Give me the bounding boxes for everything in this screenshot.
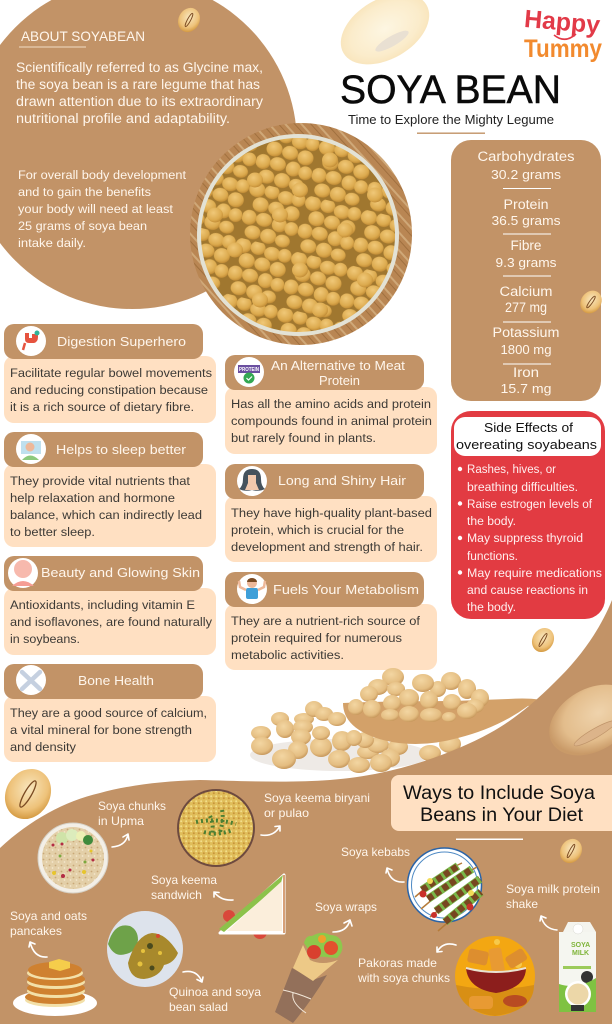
text: glycine max intro bbox=[16, 60, 263, 126]
label: pakoras bbox=[357, 957, 450, 985]
text: protein details bbox=[231, 397, 432, 445]
text: metabolism details: They are a nutrient-rich source of bbox=[231, 614, 421, 628]
nutrient: protein: Protein bbox=[504, 197, 548, 212]
food: soya milk carton: MILK bbox=[572, 950, 589, 957]
logo: happy tummy bbox=[523, 5, 602, 63]
text: bone details bbox=[10, 706, 207, 754]
wooden spoon bbox=[343, 698, 548, 744]
label: soya keema sandwich bbox=[151, 874, 218, 902]
text: daily intake: intake daily. bbox=[18, 236, 86, 250]
arrow: quinoa bbox=[183, 971, 203, 982]
spoon beans bbox=[348, 668, 489, 722]
card: long and shiny hair bbox=[225, 464, 437, 562]
nutrient: calcium: 277 mg bbox=[505, 300, 547, 315]
card: bone health: Bone Health bbox=[78, 673, 154, 688]
icon: large pale bean top bbox=[328, 0, 442, 79]
text: beauty details: Antioxidants, including vitamin E bbox=[10, 598, 195, 612]
card: digestion superhero bbox=[4, 324, 216, 423]
text: bone details: and density bbox=[10, 740, 77, 754]
text: hair details: protein, which is crucial for the bbox=[231, 523, 404, 537]
label: quinoa and soya bean salad: bean salad bbox=[169, 1001, 228, 1014]
card: helps to sleep better bbox=[4, 432, 216, 547]
panel: nutrition facts bbox=[451, 140, 601, 401]
icon: small bean lower right bbox=[556, 835, 586, 867]
label: soya keema sandwich: sandwich bbox=[151, 889, 202, 902]
heading: alternative to meat: Protein bbox=[319, 374, 360, 388]
label: soya keema biryani: or pulao bbox=[264, 807, 309, 820]
label: soya keema biryani bbox=[264, 792, 370, 820]
text: hair details: They have high-quality plant-based bbox=[231, 506, 432, 520]
list: side effect bullets: the body. bbox=[467, 514, 516, 528]
nutrient: calcium bbox=[500, 284, 552, 315]
arrow: wraps bbox=[333, 920, 352, 932]
nutrient: carbohydrates: Carbohydrates bbox=[478, 149, 575, 164]
text: bone details: They are a good source of calcium, bbox=[10, 706, 207, 720]
label: soya kebabs: Soya kebabs bbox=[341, 846, 410, 859]
heading: ways to include soya beans bbox=[391, 775, 612, 831]
food: soya keema biryani bbox=[177, 789, 255, 867]
text: glycine max intro: Scientifically referred to as Glycine max, bbox=[16, 60, 263, 75]
heading: ways to include soya beans: Beans in Your Diet bbox=[420, 805, 584, 826]
text: daily intake bbox=[18, 168, 187, 250]
label: pakoras: Pakoras made bbox=[358, 957, 437, 970]
label: soya keema sandwich: Soya keema bbox=[151, 874, 218, 887]
heading: side effects: overeating soyabeans bbox=[456, 437, 598, 452]
list: side effect bullets: Rashes, hives, or bbox=[467, 462, 556, 476]
list: side effect bullets: May require medications bbox=[467, 566, 602, 580]
label: pakoras: with soya chunks bbox=[357, 972, 450, 985]
label: soya chunks in upma: Soya chunks bbox=[98, 800, 166, 813]
food: soya milk carton bbox=[559, 922, 596, 1012]
icon: sleeping person bbox=[16, 434, 46, 464]
text: digestion details: and reducing constipation because bbox=[10, 383, 208, 397]
text: hair details: development and strength of hair. bbox=[231, 540, 423, 554]
text: daily intake: and to gain the benefits bbox=[18, 185, 151, 199]
text: glycine max intro: nutritional profile and adaptability. bbox=[16, 111, 230, 126]
text: sleep details: They provide vital nutrients that bbox=[10, 474, 191, 488]
food: sandwich bbox=[219, 875, 285, 939]
text: metabolism details: metabolic activities. bbox=[231, 648, 344, 662]
icon: crossed bones bbox=[16, 665, 46, 695]
text: metabolism details: protein required for numerous bbox=[231, 631, 402, 645]
text: daily intake: 25 grams of soya bean bbox=[18, 219, 147, 233]
card: beauty and glowing skin bbox=[4, 556, 216, 655]
card: helps to sleep better: Helps to sleep better bbox=[56, 442, 187, 457]
background: brown wave bbox=[0, 600, 612, 1024]
list: side effect bullets: May suppress thyroid bbox=[467, 531, 583, 545]
logo: happy tummy: Tummy bbox=[524, 35, 602, 63]
logo: happy tummy: Happy bbox=[523, 5, 601, 39]
list: side effect bullets: breathing difficulties. bbox=[467, 480, 578, 494]
text: protein details: but rarely found in plants. bbox=[231, 431, 376, 445]
icon: small bean top bbox=[174, 4, 204, 36]
label: quinoa and soya bean salad: Quinoa and soya bbox=[169, 986, 262, 999]
card: fuels your metabolism bbox=[225, 572, 437, 670]
text: sleep details: help relaxation and hormone bbox=[10, 491, 175, 505]
nutrient: iron: Iron bbox=[513, 365, 539, 380]
text: glycine max intro: the soya bean is a rare legume that has bbox=[16, 77, 260, 92]
list: side effect bullets bbox=[458, 462, 602, 614]
text: digestion details: Facilitate regular bowel movements bbox=[10, 366, 212, 380]
text: beauty details bbox=[10, 598, 213, 646]
nutrient: protein: 36.5 grams bbox=[492, 213, 561, 228]
arrow: soya milk bbox=[540, 916, 557, 930]
image: soybeans on wooden spoon bbox=[250, 668, 548, 773]
nutrient: calcium: Calcium bbox=[500, 284, 552, 299]
icon: protein check: PROTEIN bbox=[239, 367, 259, 373]
text: beauty details: and isoflavones, are found naturally bbox=[10, 615, 213, 629]
heading: alternative to meat: An Alternative to Meat bbox=[271, 359, 406, 373]
text: daily intake: For overall body development bbox=[18, 168, 187, 182]
subtitle: Time to Explore the Mighty Legume bbox=[348, 113, 554, 127]
text: glycine max intro: drawn attention due to its extraordinary bbox=[16, 94, 263, 109]
arrow: upma bbox=[112, 834, 129, 847]
card: bone health bbox=[4, 664, 216, 762]
food: soya kebabs bbox=[408, 848, 483, 931]
food: pakoras bowl bbox=[455, 936, 535, 1016]
label: soya and oats pancakes: pancakes bbox=[10, 925, 62, 938]
food: soya wrap bbox=[275, 933, 342, 1023]
label: quinoa and soya bean salad bbox=[169, 986, 262, 1014]
icon: large faded bean right bbox=[537, 670, 612, 770]
panel: side effects bbox=[451, 411, 605, 619]
text: sleep details bbox=[10, 474, 202, 539]
food: quinoa salad bbox=[107, 911, 183, 987]
nutrient: protein bbox=[492, 197, 561, 228]
label: soya milk protein shake: Soya milk protein bbox=[506, 883, 600, 896]
card: fuels your metabolism: Fuels Your Metabolism bbox=[273, 582, 419, 597]
arrow: sandwich bbox=[214, 892, 233, 900]
icon: bean left of wave bbox=[0, 760, 60, 828]
label: soya chunks in upma: in Upma bbox=[98, 815, 145, 828]
label: soya and oats pancakes bbox=[10, 910, 87, 938]
text: hair details bbox=[231, 506, 432, 554]
text: digestion details: it is a rich source of dietary fibre. bbox=[10, 400, 194, 414]
list: side effect bullets: functions. bbox=[467, 549, 518, 563]
list: side effect bullets: Raise estrogen levels of bbox=[467, 497, 593, 511]
text: beauty details: in soybeans. bbox=[10, 632, 80, 646]
food: soya milk carton: SOYA bbox=[571, 942, 590, 949]
label: soya wraps: Soya wraps bbox=[315, 901, 377, 914]
icon: small bean on nutrition panel bbox=[576, 286, 606, 318]
nutrient: iron bbox=[500, 365, 552, 396]
icon: woman hair bbox=[237, 466, 267, 496]
arrow: kebabs bbox=[386, 868, 404, 882]
nutrient: fibre: Fibre bbox=[510, 238, 542, 253]
panel: about soyabean circle bbox=[0, 0, 297, 309]
label: soya milk protein shake: shake bbox=[506, 898, 538, 911]
food: pancakes bbox=[13, 959, 97, 1016]
arrow: pakoras bbox=[437, 944, 456, 952]
nutrient: potassium: Potassium bbox=[492, 325, 560, 340]
nutrient: potassium: 1800 mg bbox=[500, 342, 552, 357]
icon: woman face bbox=[8, 558, 38, 588]
icon: stomach bbox=[16, 326, 46, 356]
nutrient: carbohydrates bbox=[478, 149, 575, 182]
icon: protein check bbox=[234, 357, 264, 387]
list: side effect bullets: and cause reactions in bbox=[467, 583, 588, 597]
text: protein details: compounds found in animal protein bbox=[231, 414, 432, 428]
label: soya milk protein shake bbox=[506, 883, 600, 911]
list: side effect bullets: the body. bbox=[467, 600, 516, 614]
nutrient: potassium bbox=[492, 325, 560, 357]
nutrient: carbohydrates: 30.2 grams bbox=[491, 167, 562, 182]
card: digestion superhero: Digestion Superhero bbox=[57, 334, 186, 349]
label: soya keema biryani: Soya keema biryani bbox=[264, 792, 370, 805]
heading: about soyabean: ABOUT SOYABEAN bbox=[21, 28, 145, 44]
nutrient: fibre bbox=[496, 238, 557, 270]
heading: side effects: Side Effects of bbox=[484, 420, 573, 435]
arrow: pancakes bbox=[29, 942, 47, 957]
nutrient: iron: 15.7 mg bbox=[500, 381, 552, 396]
heading: alternative to meat bbox=[271, 359, 406, 388]
floor beans bbox=[251, 701, 461, 773]
text: protein details: Has all the amino acids and protein bbox=[231, 397, 431, 411]
card: long and shiny hair: Long and Shiny Hair bbox=[278, 473, 407, 488]
title: SOYA BEAN bbox=[340, 68, 561, 112]
text: sleep details: to better sleep. bbox=[10, 525, 95, 539]
icon: strong boy bbox=[237, 574, 267, 604]
arrow: biryani bbox=[261, 826, 280, 835]
text: bone details: a vital mineral for bone strength bbox=[10, 723, 192, 737]
text: metabolism details bbox=[231, 614, 421, 662]
text: digestion details bbox=[10, 366, 212, 414]
food: upma bowl bbox=[38, 823, 108, 893]
label: soya chunks in upma bbox=[98, 800, 166, 828]
icon: small bean above wave bbox=[528, 624, 558, 656]
card: alternative to meat protein bbox=[225, 355, 437, 454]
text: sleep details: balance, which can indirectly lead bbox=[10, 508, 202, 522]
text: daily intake: your body will need at least bbox=[18, 202, 174, 216]
image: bowl of soybeans bbox=[190, 123, 412, 345]
label: soya and oats pancakes: Soya and oats bbox=[10, 910, 87, 923]
heading: side effects bbox=[456, 420, 598, 452]
nutrient: fibre: 9.3 grams bbox=[496, 255, 557, 270]
heading: ways to include soya beans: Ways to Include Soya bbox=[403, 783, 595, 804]
card: beauty and glowing skin: Beauty and Glowing Skin bbox=[41, 565, 200, 580]
